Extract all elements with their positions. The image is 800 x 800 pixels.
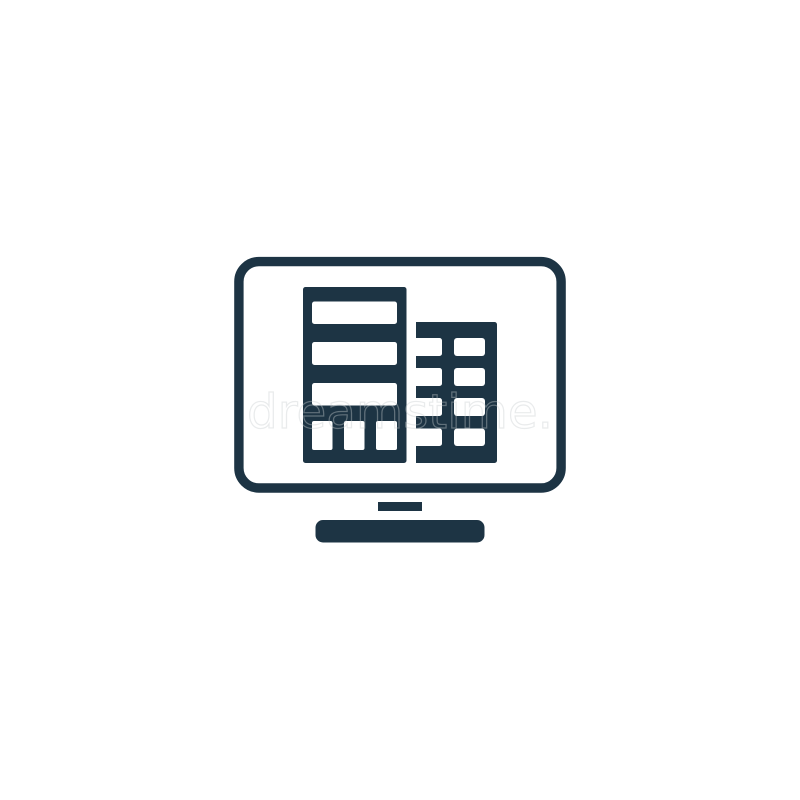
monitor base (316, 520, 484, 542)
icon: monitor with buildings (239, 262, 561, 542)
monitor screen frame (239, 262, 561, 488)
watermark: dreamstime. (247, 385, 553, 440)
icon: tall building (303, 287, 406, 463)
icon: short building (416, 322, 497, 463)
monitor neck (378, 502, 422, 511)
